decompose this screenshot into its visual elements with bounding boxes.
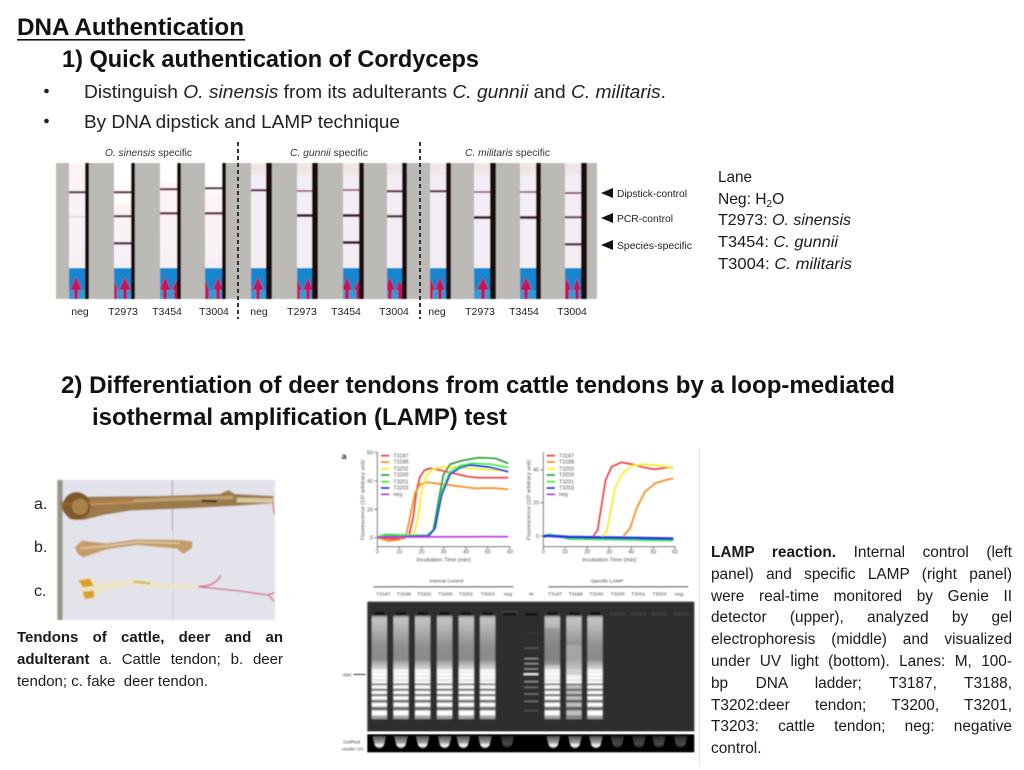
gel group labels: T3187: [376, 592, 391, 598]
right plot: specific LAMP: T3203: [559, 486, 574, 492]
right plot: specific LAMP: 60: [672, 550, 678, 556]
UV strip label: -under UV: [341, 746, 364, 752]
lane legend text: Neg: H: [718, 191, 767, 208]
heading: differentiation of deer tendons: 2) Differentiation of deer tendons from cattle tendons by a loop-mediated: [61, 372, 895, 399]
tendon caption: [17, 629, 283, 690]
LAMP reaction description: T3203: cattle tendon; neg: negative: [711, 718, 1012, 735]
heading: quick authentication of Cordyceps: 1) Quick authentication of Cordyceps: [62, 46, 479, 73]
left plot: internal control: 0: [376, 550, 379, 556]
LAMP reaction description: detector (upper), analyzed by gel: [711, 609, 1012, 626]
band marker labels: Species-specific: [617, 240, 692, 252]
dipstick panel titles: C. gunnii specific: [290, 148, 368, 159]
right plot: specific LAMP: Incubation Time (min): [582, 557, 637, 563]
figure: fluorescence plots: [342, 450, 678, 563]
lane labels: T3454: [509, 306, 539, 318]
right plot: specific LAMP: 40: [533, 468, 539, 474]
deer tendon: [75, 539, 193, 557]
fake deer tendon: [77, 575, 274, 602]
LAMP reaction description: LAMP reaction. Internal control (left: [711, 544, 1012, 561]
left plot: internal control: Incubation Time (min): [416, 557, 471, 563]
gel group labels: T3203: [652, 592, 667, 598]
photo: tendon specimens: [57, 480, 275, 620]
band marker labels: Dipstick-control: [617, 188, 687, 200]
title: DNA Authentication: DNA Authentication: [17, 14, 244, 41]
tendon caption: adulterant a. Cattle tendon; b. deer: [17, 651, 283, 668]
panel letter: a: [342, 451, 347, 461]
right plot: specific LAMP: T3202: [559, 466, 574, 472]
right plot: specific LAMP: Fluorescence (10³ arbitrary unit): [526, 460, 532, 540]
specimen letter labels: b.: [34, 539, 47, 556]
gel group labels: T3201: [459, 592, 473, 598]
left plot: internal control: 50: [485, 550, 491, 556]
lane labels: T2973: [108, 306, 138, 318]
lane labels: T2973: [287, 306, 317, 318]
lane labels: T3004: [199, 306, 229, 318]
lane labels: T3454: [152, 306, 182, 318]
lane legend text: T3004: C. militaris: [718, 256, 852, 273]
gel group labels: [373, 579, 688, 598]
gel group labels: T3188: [397, 592, 411, 598]
right plot: specific LAMP: T3187: [559, 453, 574, 459]
gel group labels: Specific LAMP: [591, 579, 624, 585]
left plot: internal control: 10: [396, 550, 402, 556]
dipstick panel titles: O. sinensis specific: [105, 148, 192, 159]
gel group labels: T3202: [589, 592, 604, 598]
LAMP reaction description: bp DNA ladder; T3187, T3188,: [711, 675, 1012, 692]
UV strip label: [341, 740, 364, 752]
right plot: specific LAMP: 0: [542, 550, 545, 556]
lane labels: neg: [71, 306, 89, 318]
heading: differentiation of deer tendons: [61, 372, 895, 431]
LAMP reaction description: under UV light (bottom). Lanes: M, 100-: [711, 653, 1012, 670]
right plot: specific LAMP: 50: [650, 550, 656, 556]
left plot: internal control: T3202: [393, 466, 408, 472]
white separator: [367, 732, 694, 734]
bullet list: Distinguish O. sinensis from its adulterants C. gunnii and C. militaris .: [84, 82, 666, 102]
left plot: internal control: T3200: [393, 473, 408, 479]
left plot: internal control: T3188: [393, 460, 408, 466]
left plot: internal control: [360, 450, 513, 563]
gel group labels: T3203: [481, 592, 495, 598]
left plot: internal control: T3187: [393, 453, 408, 459]
lane labels: T3454: [331, 306, 361, 318]
right plot: specific LAMP: T3200: [559, 473, 574, 479]
tendon caption: Tendons of cattle, deer and an: [17, 629, 283, 646]
gel group labels: T3187: [548, 592, 562, 598]
DNA ladder: [524, 613, 538, 711]
left plot: internal control: neg: [393, 492, 402, 498]
gel group labels: T3200: [611, 592, 625, 598]
left plot: internal control: T3203: [393, 486, 408, 492]
gel group labels: T3202: [417, 592, 432, 598]
left plot: internal control: 40: [367, 479, 373, 485]
gel group labels: M: [529, 592, 533, 598]
right plot: specific LAMP: 10: [562, 550, 568, 556]
right plot: specific LAMP: T3188: [559, 460, 574, 466]
right plot: specific LAMP: T3201: [559, 479, 574, 485]
gel group labels: neg: [675, 592, 683, 598]
gel group labels: neg: [504, 592, 512, 598]
right plot: specific LAMP: [526, 452, 678, 563]
LAMP reaction description: electrophoresis (middle) and visualized: [711, 631, 1012, 648]
size marker: 800: [343, 672, 352, 678]
gel group labels: T3201: [631, 592, 646, 598]
dipstick panel titles: C. militaris specific: [465, 148, 550, 159]
lane labels: [71, 306, 587, 318]
lane labels: T3004: [557, 306, 587, 318]
LAMP reaction description: were real-time monitored by Genie II: [711, 588, 1012, 605]
lane labels: neg: [250, 306, 268, 318]
bullet list: [44, 82, 666, 132]
gel image: [367, 602, 694, 732]
lane labels: T3004: [379, 306, 409, 318]
left plot: internal control: 60: [507, 550, 513, 556]
left plot: internal control: 30: [441, 550, 447, 556]
lane labels: T2973: [465, 306, 495, 318]
legend: [381, 456, 389, 494]
left plot: internal control: 60: [367, 450, 373, 456]
specimen letter labels: c.: [34, 583, 46, 600]
lane legend text: O: [772, 191, 784, 208]
right plot: specific LAMP: 20: [533, 501, 539, 507]
lane legend text: 2: [767, 199, 773, 210]
left plot: internal control: 40: [463, 550, 469, 556]
LAMP reaction description: T3202:deer tendon; T3200, T3201,: [711, 697, 1012, 714]
dipstick panel titles: [105, 148, 550, 159]
lane legend text: [718, 169, 852, 273]
gel group labels: Internal Control: [429, 579, 463, 585]
UV strip label: GelRed: [343, 740, 360, 746]
band marker labels: [601, 188, 692, 252]
left plot: internal control: Fluorescence (10³ arbitrary unit): [360, 460, 366, 540]
UV tube strip: [367, 734, 694, 752]
bullet list: By DNA dipstick and LAMP technique: [84, 112, 400, 132]
right plot: specific LAMP: 40: [628, 550, 634, 556]
lane legend text: T3454: C. gunnii: [718, 234, 839, 251]
heading: differentiation of deer tendons: isothermal amplification (LAMP) test: [92, 404, 507, 431]
right plot: specific LAMP: 20: [584, 550, 590, 556]
band marker labels: PCR-control: [617, 213, 673, 225]
LAMP reaction description: [711, 544, 1012, 757]
size marker: [343, 672, 366, 678]
left plot: internal control: 20: [419, 550, 425, 556]
left plot: internal control: 20: [367, 507, 373, 513]
figure: gel electrophoresis: [341, 579, 694, 752]
gel group labels: T3188: [569, 592, 583, 598]
dipstick strips photo: [56, 163, 597, 299]
left plot: internal control: T3201: [393, 479, 408, 485]
cattle tendon: [60, 490, 274, 520]
gel group labels: T3200: [438, 592, 453, 598]
specimen letter labels: [34, 496, 47, 600]
specimen letter labels: a.: [34, 496, 47, 513]
lane legend text: Lane: [718, 169, 752, 186]
dashed lane group dividers: [238, 142, 420, 319]
left plot: internal control: 0: [370, 536, 373, 542]
panel: DNA dipstick photo figure: [56, 142, 692, 319]
right plot: specific LAMP: neg: [559, 492, 568, 498]
lane legend text: T2973: O. sinensis: [718, 212, 851, 229]
tendon caption: tendon; c. fake deer tendon.: [17, 673, 208, 690]
right plot: specific LAMP: 30: [606, 550, 612, 556]
LAMP reaction description: panel) and specific LAMP (right panel): [711, 566, 1012, 583]
LAMP reaction description: control.: [711, 740, 761, 757]
lane labels: neg: [428, 306, 446, 318]
right plot: specific LAMP: 0: [536, 534, 539, 540]
